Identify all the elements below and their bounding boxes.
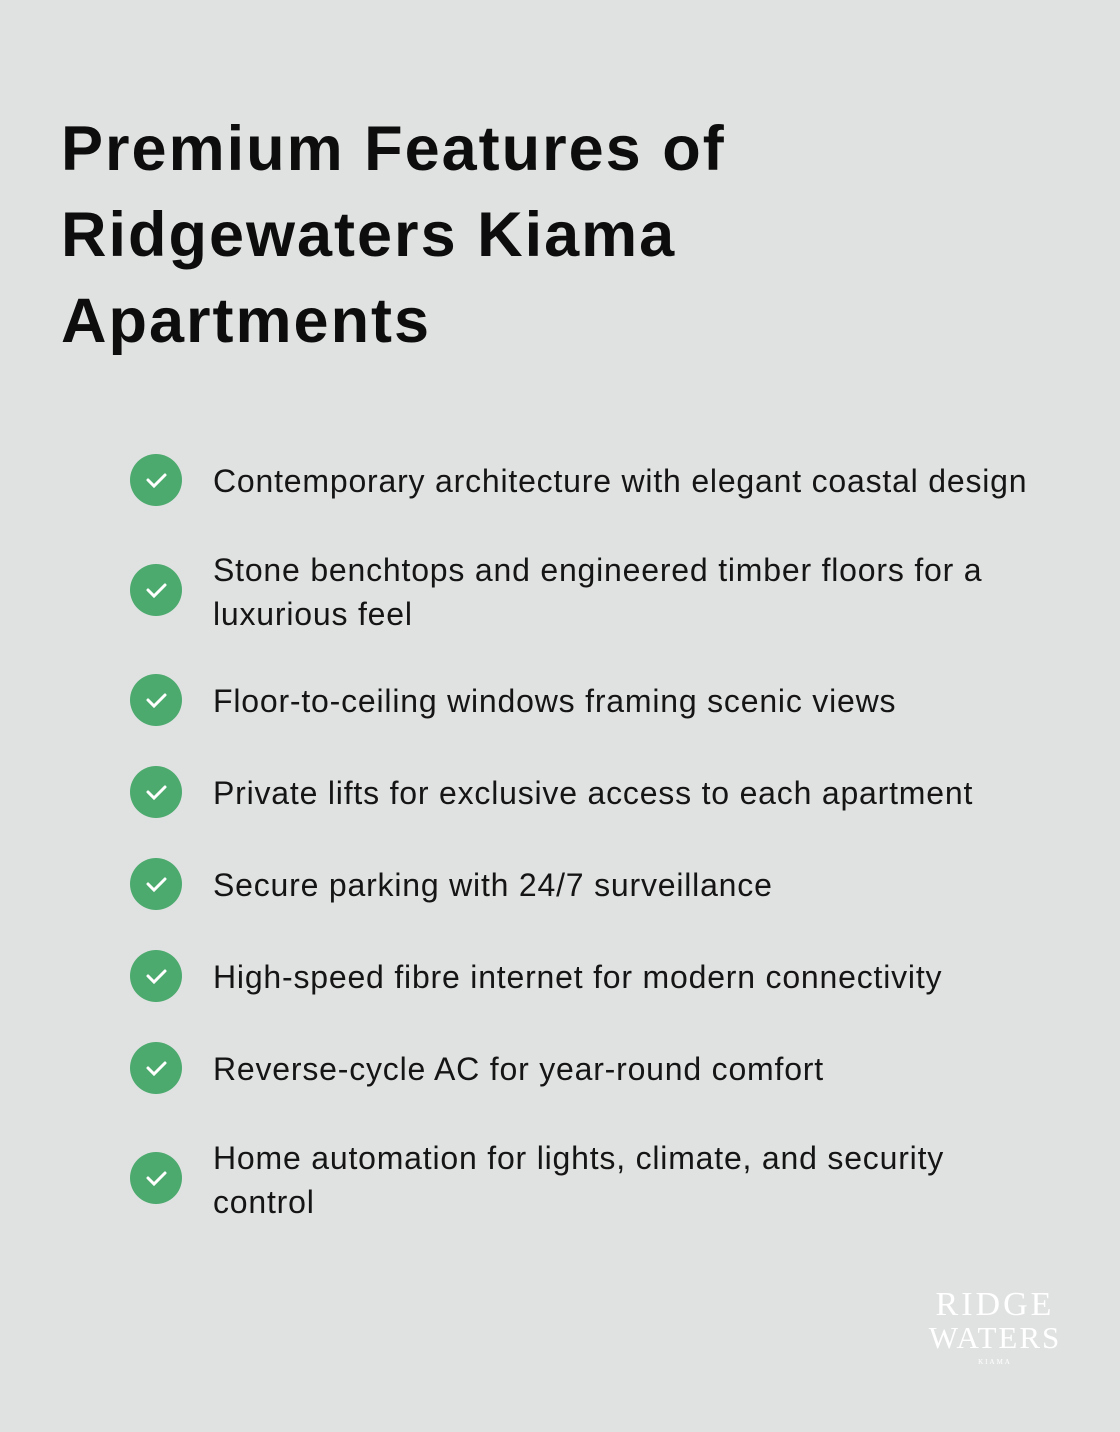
title: Ridgewaters Kiama	[61, 200, 676, 270]
item 2: Stone benchtops and engineered timber floors for a	[213, 552, 982, 588]
item 8: control	[213, 1184, 315, 1220]
item 7: Reverse-cycle AC for year-round comfort	[213, 1051, 824, 1087]
logo: RIDGE	[936, 1286, 1054, 1323]
title	[61, 114, 726, 356]
title: Apartments	[61, 286, 431, 356]
item 5	[130, 858, 773, 910]
title: Premium Features of	[61, 114, 726, 184]
logo: WATERS	[929, 1320, 1061, 1355]
item 7	[130, 1042, 824, 1094]
logo: KIAMA	[978, 1358, 1012, 1366]
item 6	[130, 950, 942, 1002]
item 8	[130, 1140, 944, 1220]
item 2: luxurious feel	[213, 596, 413, 632]
item 2	[130, 552, 982, 632]
item 1	[130, 454, 1027, 506]
item 4	[130, 766, 973, 818]
item 8: Home automation for lights, climate, and security	[213, 1140, 944, 1176]
item 5: Secure parking with 24/7 surveillance	[213, 867, 773, 903]
item 3: Floor-to-ceiling windows framing scenic views	[213, 683, 896, 719]
item 6: High-speed fibre internet for modern connectivity	[213, 959, 942, 995]
item 1: Contemporary architecture with elegant coastal design	[213, 463, 1027, 499]
item 3	[130, 674, 896, 726]
logo	[928, 1286, 1061, 1366]
item 4: Private lifts for exclusive access to each apartment	[213, 775, 973, 811]
